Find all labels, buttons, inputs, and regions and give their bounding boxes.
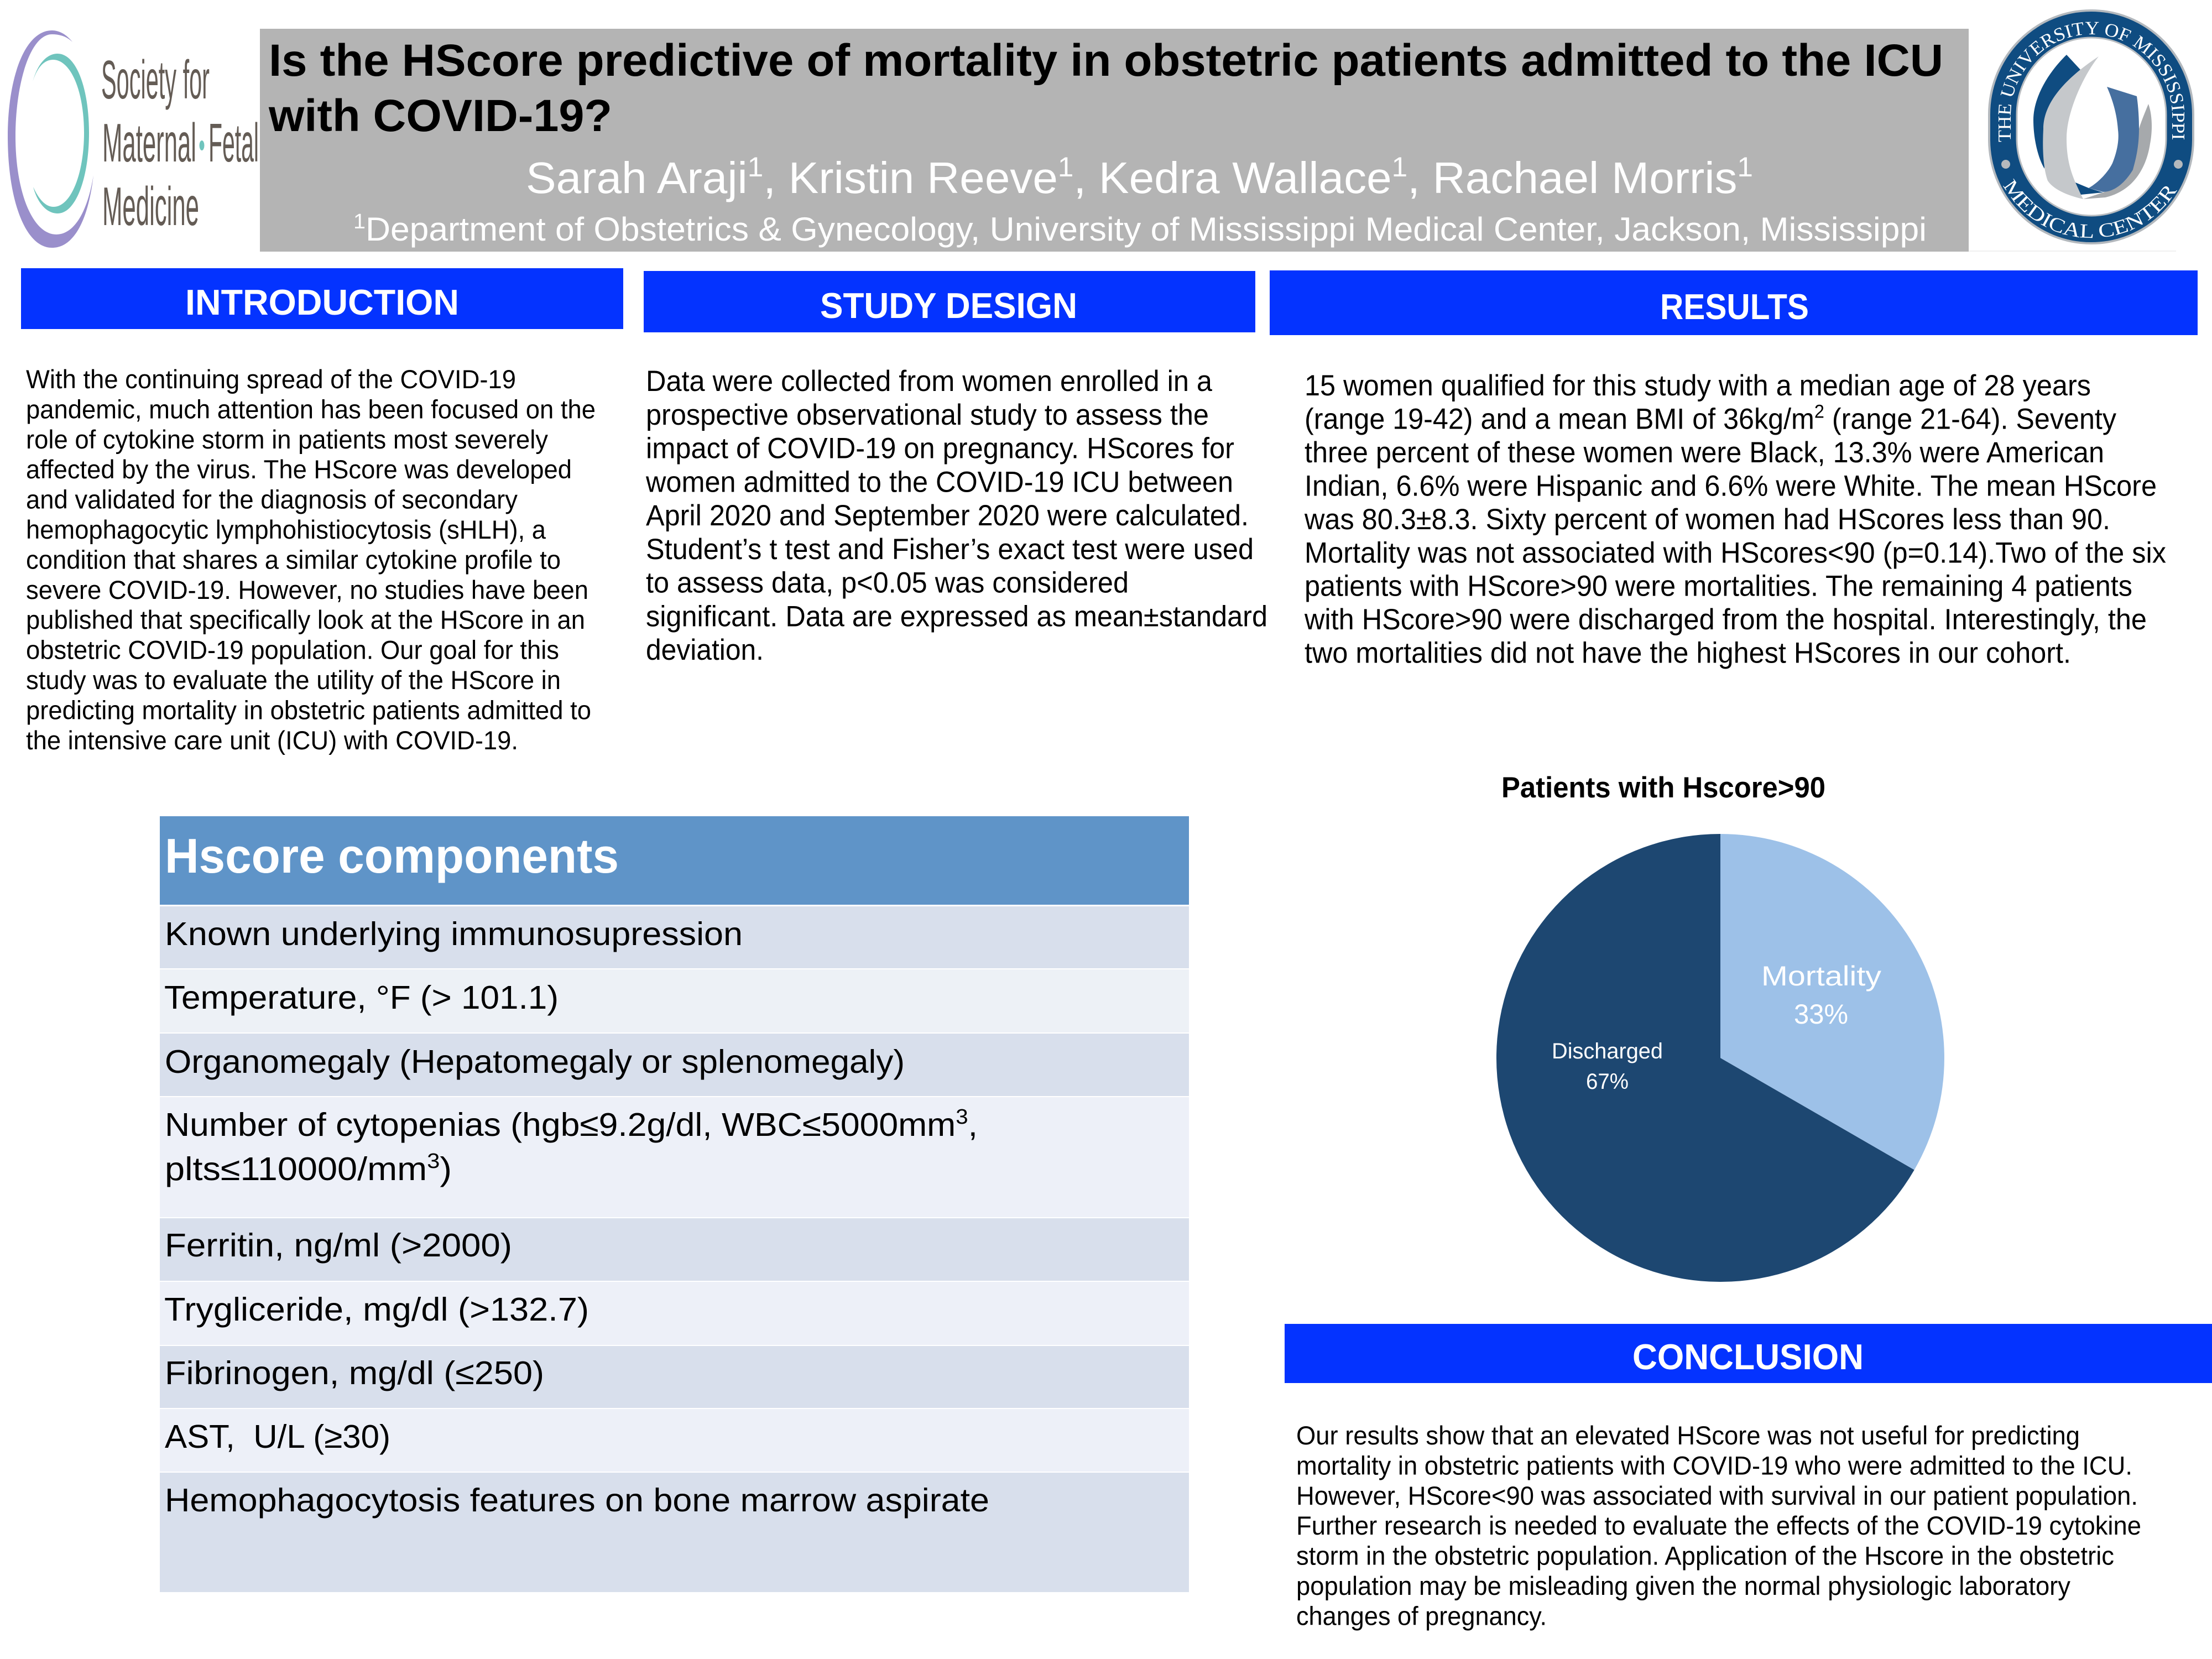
seal text: lower arc: MEDICAL CENTER [2003, 178, 2177, 238]
title [268, 35, 1943, 141]
text block: conclusion body: storm in the obstetric population. Application of the Hscore in the obstetric [1296, 1542, 2114, 1571]
text block: results body: patients with HScore>90 were mortalities. The remaining 4 patients [1305, 570, 2132, 603]
text block: study design body: women admitted to the COVID-19 ICU between [645, 466, 1233, 498]
text block: results body: was 80.3±8.3. Sixty percent of women had HScores less than 90. [1304, 503, 2110, 536]
row: organomegaly: Organomegaly (Hepatomegaly or splenomegaly) [165, 1044, 905, 1080]
row: triglyceride [160, 1282, 1189, 1345]
text block: results body: (range 19-42) and a mean BMI of 36kg/m [1305, 403, 1839, 436]
chart title: Patients with Hscore>90 [1501, 771, 1825, 804]
authors: Sarah Araji [526, 153, 742, 202]
authors: 1 [748, 152, 763, 182]
row: fibrinogen: Fibrinogen, mg/dl (≤250) [165, 1355, 544, 1391]
icon: purple crescent [8, 30, 93, 248]
text block: conclusion body: However, HScore<90 was associated with survival in our patient population. [1296, 1481, 2138, 1511]
text block: introduction body: predicting mortality in obstetric patients admitted to [26, 696, 591, 725]
text block: introduction body: hemophagocytic lymphohistiocytosis (sHLH), a [26, 515, 546, 545]
text: Fetal [208, 112, 259, 173]
row: temperature [160, 969, 1189, 1032]
row: temperature: Temperature, °F (> 101.1) [164, 979, 559, 1016]
text block: study design body: to assess data, p<0.05 was considered [646, 566, 1129, 599]
authors: , Kristin Reeve [763, 153, 1058, 202]
row: hemophagocytosis: Hemophagocytosis features on bone marrow aspirate [165, 1482, 989, 1519]
heading: results: RESULTS [1660, 286, 1809, 327]
text block: conclusion body: mortality in obstetric patients with COVID-19 who were admitted to the ICU. [1296, 1451, 2132, 1480]
text block: conclusion body: Our results show that an elevated HScore was not useful for predicting [1296, 1421, 2080, 1451]
text block: study design body [645, 365, 1267, 666]
label: discharged [1552, 1039, 1663, 1094]
logo: Society for Maternal-Fetal Medicine: Maternal [102, 112, 196, 173]
row: fibrinogen [160, 1346, 1189, 1408]
panel: results [1270, 270, 2198, 670]
icon: teal dot [199, 140, 205, 150]
text block: study design body: impact of COVID-19 on pregnancy. HScores for [646, 432, 1234, 465]
text block: results body: two mortalities did not have the highest HScores in our cohort. [1305, 637, 2071, 670]
icon: seal ribbons [2033, 55, 2152, 199]
panel: conclusion [1285, 1324, 2212, 1631]
text block: introduction body: pandemic, much attention has been focused on the [26, 395, 596, 424]
text block: introduction body: published that specifically look at the HScore in an [26, 606, 585, 635]
label: mortality [1761, 961, 1881, 1030]
authors: , Rachael Morris [1407, 153, 1738, 202]
row: cytopenias: Number of cytopenias (hgb≤9.2g/dl, WBC≤5000mm [165, 1107, 911, 1143]
text block: introduction body: the intensive care unit (ICU) with COVID-19. [26, 726, 518, 755]
text block: study design body: prospective observational study to assess the [646, 399, 1209, 431]
text block: results body: (range 21-64). Seventy [1824, 403, 2117, 436]
icon: seal dots [2001, 160, 2183, 169]
text block: study design body: Student’s t test and Fisher’s exact test were used [646, 533, 1254, 566]
text block: introduction body: obstetric COVID-19 population. Our goal for this [26, 636, 559, 665]
text block: introduction body: and validated for the diagnosis of secondary [26, 486, 518, 515]
row: hemophagocytosis [160, 1473, 1189, 1592]
text block: conclusion body: Further research is needed to evaluate the effects of the COVID-19 cytokine [1296, 1511, 2141, 1541]
row: cytopenias: ) [440, 1151, 452, 1187]
label: discharged: 67% [1586, 1070, 1629, 1094]
icon: teal crescent [33, 54, 89, 213]
authors: , Kedra Wallace [1073, 153, 1392, 202]
panel: introduction [21, 268, 623, 755]
text block: conclusion body [1296, 1421, 2141, 1631]
row: ferritin: Ferritin, ng/ml (>2000) [165, 1227, 512, 1264]
authors: 1 [1058, 152, 1073, 182]
seal text: upper arc: THE UNIVERSITY OF MISSISSIPPI [1999, 22, 2184, 142]
heading: introduction [21, 268, 623, 329]
text block: introduction body: condition that shares a similar cytokine profile to [26, 545, 561, 575]
authors: 1 [1392, 152, 1407, 182]
text block: study design body: Data were collected from women enrolled in a [646, 365, 1213, 398]
chart: pie of patients with Hscore>90 [1496, 771, 1944, 1282]
table: Hscore components [160, 816, 1189, 1592]
text block: results body: 2 [1814, 401, 1824, 422]
pie slice: discharged [1496, 834, 1914, 1282]
title: with COVID-19? [268, 91, 612, 141]
panel: study design [644, 271, 1267, 666]
heading: introduction: INTRODUCTION [185, 282, 459, 322]
heading: conclusion: CONCLUSION [1632, 1337, 1864, 1377]
row: organomegaly [160, 1034, 1189, 1096]
affiliation: 1 [353, 210, 366, 233]
label: mortality: 33% [1794, 999, 1848, 1030]
row: triglyceride: Trygliceride, mg/dl (>132.7) [164, 1291, 589, 1328]
heading: study design: STUDY DESIGN [820, 285, 1077, 326]
label: discharged: Discharged [1552, 1039, 1663, 1063]
text block: introduction body: severe COVID-19. However, no studies have been [26, 576, 588, 605]
row: ferritin [160, 1218, 1189, 1281]
logo: Society for Maternal-Fetal Medicine: Society for [101, 49, 210, 110]
text block: conclusion body: changes of pregnancy. [1296, 1601, 1547, 1631]
text block: results body: 15 women qualified for this study with a median age of 28 years [1305, 369, 2091, 402]
affiliation: Department of Obstetrics & Gynecology, University of Mississippi Medical Center, Jackson, Mississippi [366, 211, 1927, 248]
text block: results body: Indian, 6.6% were Hispanic and 6.6% were White. The mean HScore [1305, 469, 2157, 502]
text block: introduction body [26, 365, 596, 755]
text block: introduction body: study was to evaluate the utility of the HScore in [26, 666, 561, 695]
row: immunosuppression [160, 906, 1189, 968]
text block: study design body: significant. Data are expressed as mean±standard [646, 600, 1267, 633]
text block: results body: Mortality was not associated with HScores<90 (p=0.14).Two of the six [1305, 536, 2166, 569]
table header: Hscore components [165, 828, 619, 883]
heading: study design [644, 271, 1255, 332]
row: AST: AST, U/L (≥30) [165, 1418, 390, 1455]
logo: Society for Maternal-Fetal Medicine [8, 30, 259, 248]
heading: conclusion [1285, 1324, 2212, 1383]
logo: University of Mississippi Medical Center seal [1988, 9, 2194, 244]
text block: results body [1304, 369, 2166, 670]
label: mortality: Mortality [1761, 961, 1881, 992]
row: AST [160, 1409, 1189, 1472]
row: cytopenias: 3 [956, 1105, 968, 1129]
row: immunosuppression: Known underlying immunosupression [165, 916, 743, 952]
heading: results [1270, 270, 2198, 335]
text block: study design body: April 2020 and September 2020 were calculated. [646, 499, 1249, 532]
row: cytopenias [160, 1097, 1189, 1217]
title: Is the HScore predictive of mortality in obstetric patients admitted to the ICU [269, 35, 1943, 86]
table header [160, 816, 1189, 905]
row: cytopenias: 3 [427, 1150, 440, 1173]
text block: introduction body: With the continuing spread of the COVID-19 [26, 365, 516, 394]
text block: results body: with HScore>90 were discharged from the hospital. Interestingly, the [1304, 603, 2147, 636]
text block: introduction body: role of cytokine storm in patients most severely [26, 425, 548, 455]
text block: introduction body: affected by the virus. The HScore was developed [26, 455, 572, 484]
text block: results body: three percent of these women were Black, 13.3% were American [1305, 436, 2104, 469]
panel: title banner [260, 29, 1969, 252]
row: cytopenias: , [968, 1107, 978, 1143]
row: cytopenias: plts≤110000/mm [165, 1151, 403, 1187]
logo: Society for Maternal-Fetal Medicine: Medicine [102, 176, 199, 237]
text block: conclusion body: population may be misleading given the normal physiologic laboratory [1296, 1572, 2070, 1601]
pie slice: mortality [1720, 834, 1944, 1170]
authors: 1 [1738, 152, 1753, 182]
text block: study design body: deviation. [646, 634, 764, 666]
